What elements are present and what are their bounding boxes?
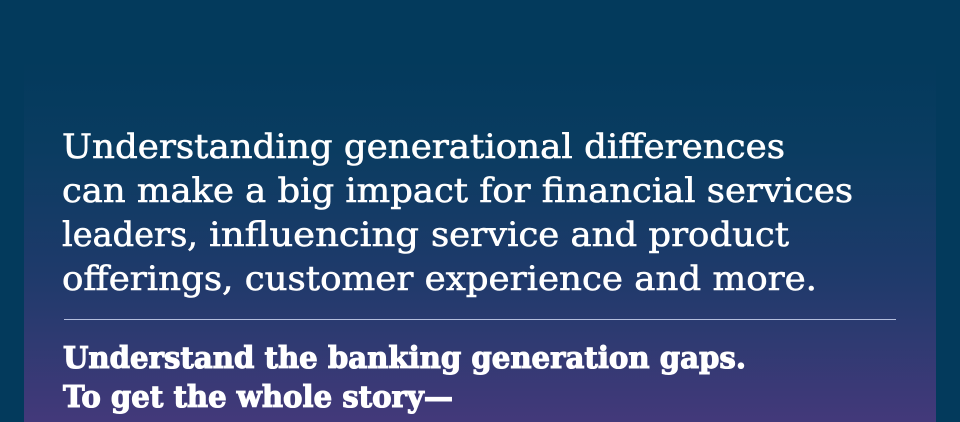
call to action heading: Understand the banking generation gaps. [63,341,746,376]
intro text block: influencing [209,215,419,255]
intro text block: offerings, customer experience and more. [62,259,817,299]
intro text block: leaders, [62,215,198,255]
intro text block [62,127,853,299]
intro text block: Understanding generational differences [62,127,785,167]
call to action heading: To get the whole story— [63,380,453,415]
call to action heading [63,341,746,415]
intro text block: service and product [431,215,789,255]
intro text block: can make a big impact for financial services [62,171,853,211]
